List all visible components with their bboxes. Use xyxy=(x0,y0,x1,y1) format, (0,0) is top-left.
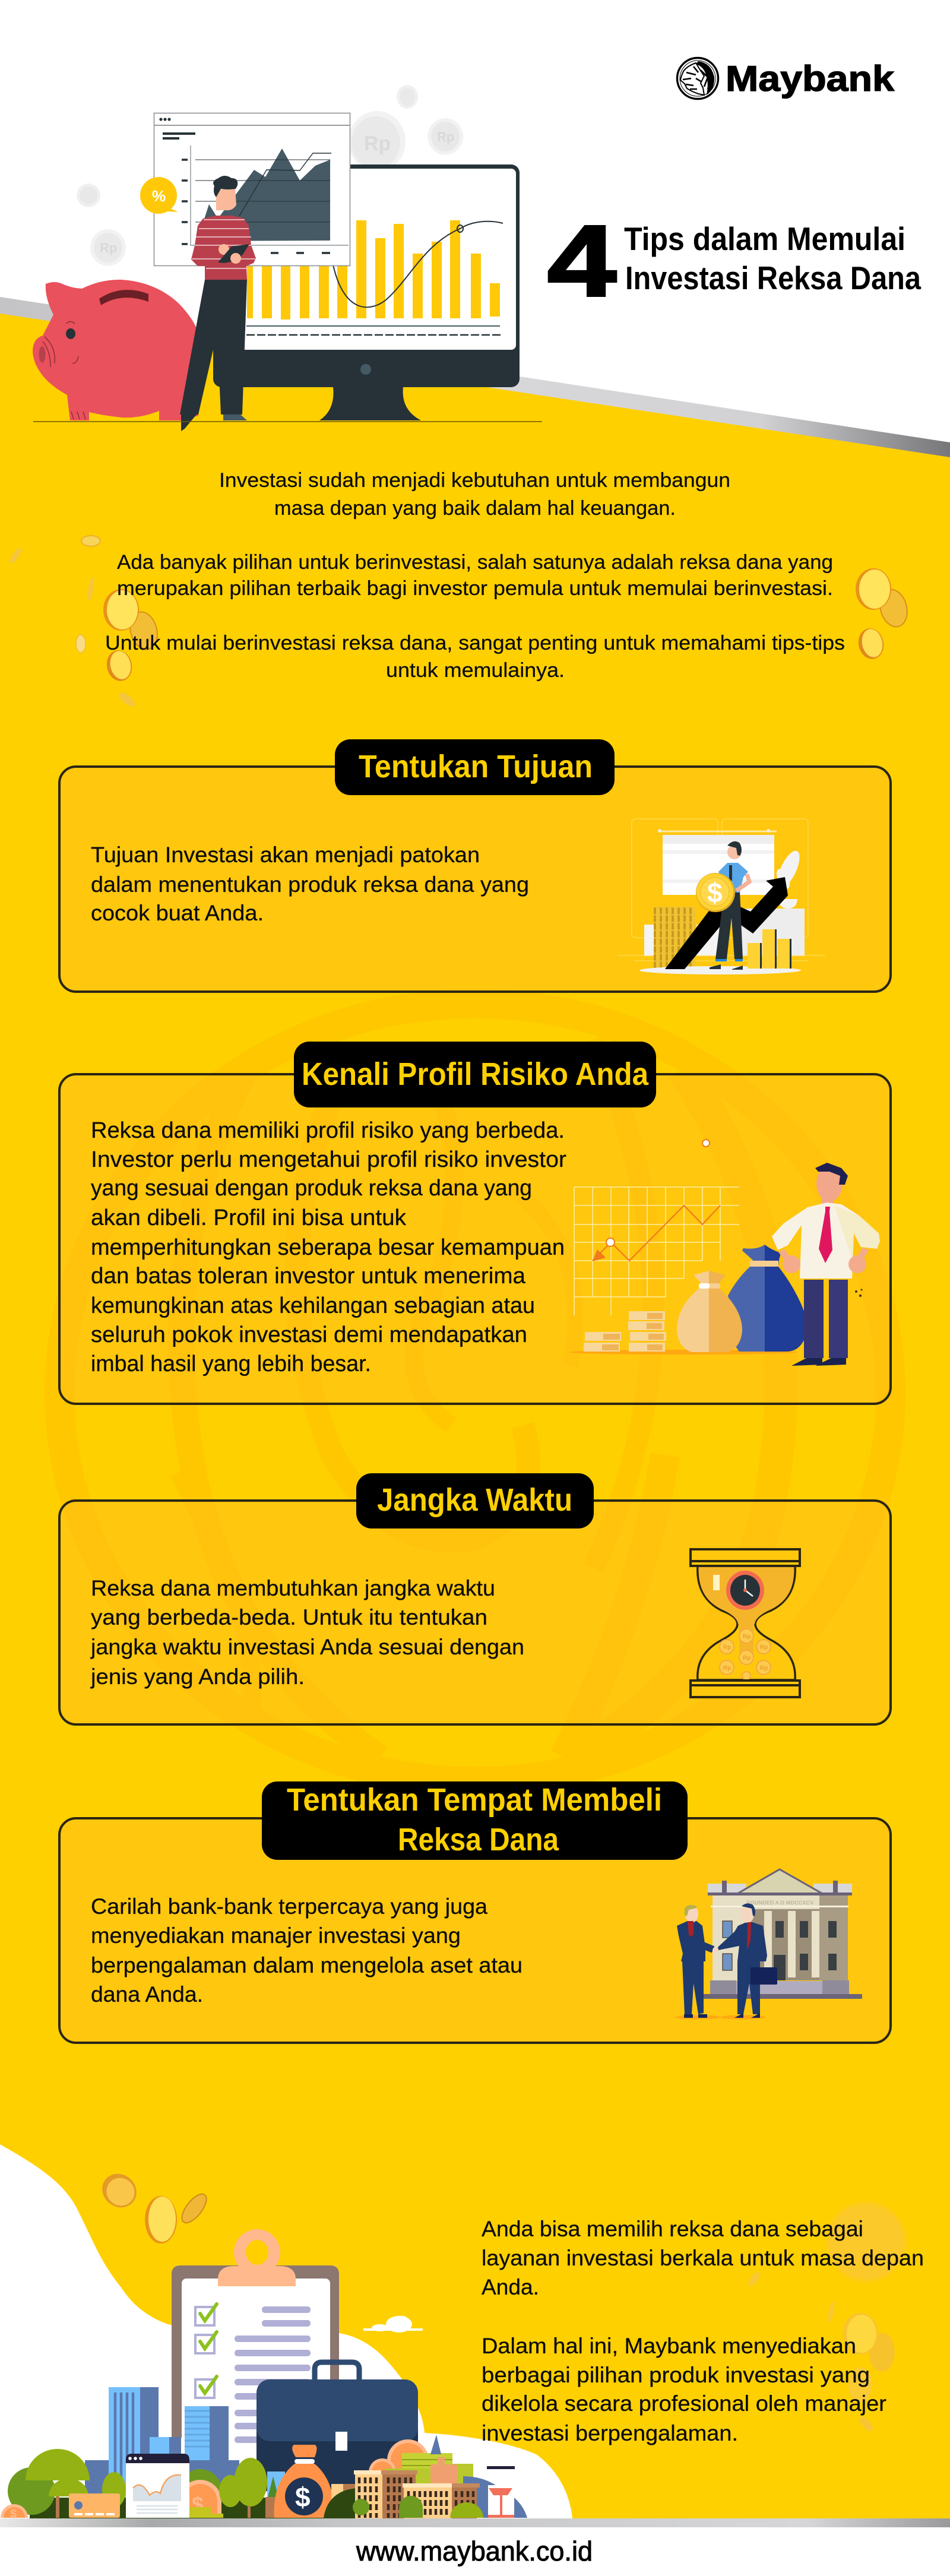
handshake men xyxy=(675,1903,777,2019)
orange money bag: $ xyxy=(295,2482,311,2512)
man sweater xyxy=(191,216,256,280)
closing paragraph 2: Dalam hal ini, Maybank menyediakan xyxy=(482,2334,856,2358)
heading pill: Jangka Waktu xyxy=(377,1482,572,1518)
closing paragraph 2: dikelola secara profesional oleh manajer xyxy=(482,2391,886,2416)
intro paragraph 1: Investasi sudah menjadi kebutuhan untuk membangun xyxy=(219,469,730,492)
percent speech bubble: % xyxy=(152,187,166,205)
browser chart window xyxy=(126,2454,189,2518)
heading pill: Tentukan Tujuan xyxy=(359,749,593,784)
rupiah coins: Rp xyxy=(723,1665,731,1672)
closing illustration xyxy=(1,2229,527,2521)
worried man xyxy=(772,1163,880,1366)
cloud xyxy=(363,2316,423,2333)
closing paragraph 1: Anda bisa memilih reksa dana sebagai xyxy=(482,2217,863,2241)
monitor xyxy=(213,164,520,420)
clipboard xyxy=(172,2229,339,2445)
icon: worried investor with money bags xyxy=(569,1140,880,1366)
footer grey band xyxy=(0,2518,950,2527)
card frame xyxy=(59,1074,891,1404)
falling coins left xyxy=(8,536,162,709)
card text: dana Anda. xyxy=(91,1982,203,2007)
heading pill: Reksa Dana xyxy=(398,1822,559,1857)
large coin behind window xyxy=(178,2469,223,2518)
card frame xyxy=(59,767,891,992)
card text: Reksa dana membutuhkan jangka waktu xyxy=(91,1576,495,1600)
ground line xyxy=(33,421,542,422)
rupiah coins: Rp xyxy=(760,1644,768,1651)
bank building: FOUNDED A D MDCCXCV xyxy=(747,1900,813,1906)
intro paragraph 1: masa depan yang baik dalam hal keuangan. xyxy=(274,497,676,520)
heading pill xyxy=(335,739,615,795)
card text: seluruh pokok investasi demi mendapatkan xyxy=(91,1322,527,1347)
large coin behind window: $ xyxy=(192,2492,204,2517)
monitor trend curve xyxy=(246,221,503,335)
intro paragraph 1 xyxy=(219,469,730,520)
coin left: $ xyxy=(10,2508,17,2521)
icon: man with coin and rising arrow: $ xyxy=(707,877,723,908)
icon: hourglass with clock and coins xyxy=(691,1549,800,1697)
footer url: www.maybank.co.id xyxy=(356,2536,593,2566)
trees left xyxy=(8,2449,126,2518)
faded rupiah coins: Rp xyxy=(100,240,117,255)
man trousers xyxy=(180,280,247,414)
intro text xyxy=(105,469,845,682)
falling coins right xyxy=(856,568,911,662)
chart panel xyxy=(154,113,350,266)
heading pill xyxy=(294,1042,656,1107)
heading pill xyxy=(262,1781,688,1860)
percent speech bubble xyxy=(140,177,178,214)
intro paragraph 3: Untuk mulai berinvestasi reksa dana, sangat penting untuk memahami tips-tips xyxy=(105,632,845,654)
title numeral: 4 xyxy=(547,205,616,318)
heading pill: Tentukan Tempat Membeli xyxy=(287,1782,662,1818)
faded rupiah coins: Rp xyxy=(364,132,391,155)
closing paragraph 1: layanan investasi berkala untuk masa depan xyxy=(482,2246,924,2270)
card text: jangka waktu investasi Anda sesuai dengan xyxy=(90,1635,524,1659)
card text: cocok buat Anda. xyxy=(91,901,264,925)
card text: kemungkinan atas kehilangan sebagian atau xyxy=(91,1293,535,1318)
icon: bank building with handshake xyxy=(675,1869,862,2019)
heading pill xyxy=(356,1473,594,1528)
closing paragraph 2 xyxy=(482,2334,886,2445)
intro paragraph 2: Ada banyak pilihan untuk berinvestasi, salah satunya adalah reksa dana yang xyxy=(117,551,833,574)
card text: dan batas toleran investor untuk menerima xyxy=(91,1264,526,1289)
card text: yang sesuai dengan produk reksa dana yang xyxy=(91,1176,532,1201)
banknote stacks xyxy=(386,2453,473,2485)
bank card xyxy=(69,2493,120,2518)
closing paragraph 1 xyxy=(482,2217,924,2299)
title line 1: Tips dalam Memulai xyxy=(624,220,905,257)
office towers xyxy=(85,2387,239,2518)
logo wordmark: Maybank xyxy=(726,59,895,99)
panel: tentukan tujuan xyxy=(59,739,891,992)
faded rupiah coins: Rp xyxy=(437,129,454,144)
closing paragraph 2: investasi berpengalaman. xyxy=(482,2421,738,2445)
lion emblem watermark xyxy=(59,1004,891,1781)
card frame xyxy=(59,1818,891,2043)
panel: kenali profil risiko xyxy=(59,1042,891,1404)
tan money bag xyxy=(677,1271,742,1352)
card text xyxy=(91,843,529,925)
heading pill: Kenali Profil Risiko Anda xyxy=(302,1056,649,1092)
orange money bag xyxy=(274,2445,334,2518)
card text: memperhitungkan seberapa besar kemampuan xyxy=(91,1235,565,1260)
card text: Reksa dana memiliki profil risiko yang berbeda. xyxy=(91,1118,565,1143)
hill and coins xyxy=(324,2439,429,2518)
card text: Carilah bank-bank terpercaya yang juga xyxy=(91,1894,487,1919)
card text: berpengalaman dalam mengelola aset atau xyxy=(91,1953,522,1977)
floating coins over blob xyxy=(96,2167,211,2243)
brand logo xyxy=(677,58,895,99)
card text: dalam menentukan produk reksa dana yang xyxy=(91,872,529,897)
money stacks xyxy=(584,1311,666,1352)
icon: man with coin and rising arrow xyxy=(618,819,825,974)
intro paragraph 3: untuk memulainya. xyxy=(386,659,565,682)
blue money bag xyxy=(728,1245,805,1352)
risk grid chart xyxy=(574,1140,739,1315)
piggy bank xyxy=(33,280,198,420)
monitor bar chart xyxy=(247,220,500,319)
rupiah coins xyxy=(720,1629,771,1680)
closing text xyxy=(482,2217,924,2445)
closing white blob xyxy=(0,2144,572,2518)
man tablet xyxy=(218,244,229,255)
rupiah coins: Rp xyxy=(723,1644,731,1651)
faded coins right xyxy=(746,2191,917,2433)
rupiah coins: Rp xyxy=(743,1655,750,1662)
rupiah coins: Rp xyxy=(760,1665,768,1672)
hero illustration xyxy=(33,85,542,431)
intro paragraph 3 xyxy=(105,632,845,682)
card text: imbal hasil yang lebih besar. xyxy=(91,1352,371,1376)
faded rupiah coins xyxy=(77,85,463,266)
logo emblem xyxy=(677,58,718,99)
rupiah coins: Rp xyxy=(743,1634,750,1640)
panel: jangka waktu xyxy=(59,1473,891,1724)
card text xyxy=(91,1118,566,1376)
closing paragraph 1: Anda. xyxy=(482,2275,539,2299)
card text: Tujuan Investasi akan menjadi patokan xyxy=(91,843,480,867)
brick buildings xyxy=(353,2470,483,2518)
card text: jenis yang Anda pilih. xyxy=(90,1664,305,1689)
intro paragraph 2 xyxy=(117,551,833,600)
card text: akan dibeli. Profil ini bisa untuk xyxy=(91,1205,407,1230)
blue dome and hourglass xyxy=(430,2435,527,2518)
briefcase xyxy=(256,2362,418,2491)
closing paragraph 2: berbagai pilihan produk investasi yang xyxy=(482,2363,870,2387)
title xyxy=(547,205,921,318)
man head xyxy=(216,188,236,210)
card text: Investor perlu mengetahui profil risiko investor xyxy=(91,1147,566,1172)
trees center xyxy=(219,2458,285,2518)
card text: menyediakan manajer investasi yang xyxy=(91,1923,461,1948)
card text: yang berbeda-beda. Untuk itu tentukan xyxy=(91,1605,487,1629)
ground shadow xyxy=(569,1350,797,1355)
coin left xyxy=(1,2504,28,2521)
grey diagonal band xyxy=(0,297,950,460)
clock xyxy=(726,1571,764,1610)
card text xyxy=(90,1576,524,1689)
card frame xyxy=(59,1501,891,1724)
bank building xyxy=(704,1869,862,1999)
intro paragraph 2: merupakan pilihan terbaik bagi investor pemula untuk memulai berinvestasi. xyxy=(117,577,833,600)
ground foliage xyxy=(30,2498,362,2518)
card text xyxy=(91,1894,522,2007)
title line 2: Investasi Reksa Dana xyxy=(625,260,921,296)
panel: tempat membeli xyxy=(59,1781,891,2043)
investor man xyxy=(180,176,256,431)
